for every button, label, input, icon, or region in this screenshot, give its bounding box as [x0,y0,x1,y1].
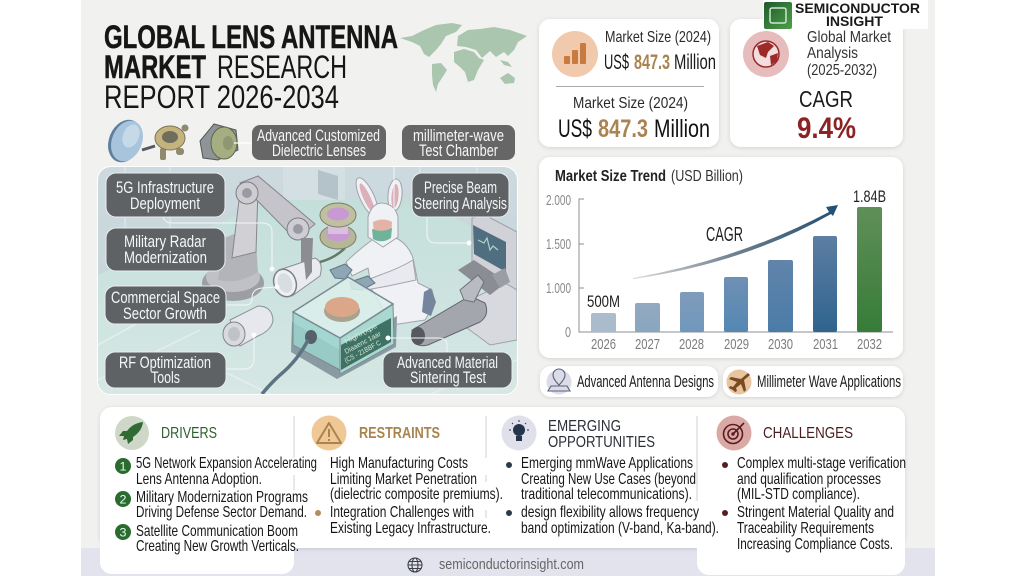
panel: market size card [539,19,719,147]
year labels: 2029 [724,336,749,353]
connector dots [252,240,472,340]
y axis labels: 2.000 [546,192,571,209]
icon: web globe [408,558,422,572]
icon: target [716,416,752,450]
numbered list: 3 [120,526,127,540]
label: RF optimization tools [105,352,226,388]
numbered list: 5G Network Expansion Accelerating [136,455,317,472]
numbered list [115,455,317,555]
bullet list: Creating New Use Cases (beyond [521,471,696,488]
technician in bunny-ear suit [330,175,436,325]
panel: market size card: 847.3 [634,51,670,74]
panel: market size card: Million [674,51,716,74]
panel: bottom summary [100,407,906,575]
section: drivers: DRIVERS [161,425,217,442]
numbered list: 1 [120,460,127,474]
panel: CAGR card: 9.4% [797,112,856,145]
bullet list: Existing Legacy Infrastructure. [330,520,491,537]
label: millimeter-wave test chamber [402,125,515,160]
panel: market size card: Million [654,115,710,143]
chart title: (USD Billion) [671,168,743,185]
pill: advanced antenna designs: Advanced Antenna Designs [577,372,714,391]
label: precise beam steering analysis [412,173,509,217]
panel: market size card: 847.3 [598,115,648,143]
section: challenges [716,416,906,553]
icon: dielectric lens [102,115,155,167]
sintering tank: Highr(xpe [344,323,379,346]
pill: millimeter wave applications [723,366,903,397]
bullet list: Complex multi-stage verification [737,455,906,472]
panel: CAGR card: Analysis [807,45,858,62]
bullet list: (MIL-STD compliance). [737,486,860,503]
footer band [81,548,935,576]
icon: light bulb [502,416,536,450]
section: restraints [312,416,503,537]
bullet list: design flexibility allows frequency [521,504,699,521]
panel: lab scene [97,166,518,395]
bullet list: Limiting Market Penetration [330,471,477,488]
numbered list: Lens Antenna Adoption. [136,471,262,488]
sintering tank [262,277,397,394]
bars [591,207,882,332]
label: advanced material sintering test: Advanced Material [397,354,498,372]
section: challenges: CHALLENGES [763,425,853,442]
y axis labels [546,192,571,341]
bullet list [506,455,719,537]
sintering tank: Diaaenc 1aar [344,331,383,356]
label: RF optimization tools: Tools [151,369,180,387]
label: advanced material sintering test [383,352,512,388]
robot arm [202,176,315,301]
label: millimeter-wave test chamber: Test Chamber [419,142,498,160]
icon: globe [743,31,789,77]
panel: market size trend chart: CAGR [706,224,743,246]
label: precise beam steering analysis: Steering Analysis [414,195,507,213]
panel: CAGR card: Global Market [807,29,891,46]
bullet list: Emerging mmWave Applications [521,455,693,472]
label: 5G infrastructure deployment: Deployment [130,195,200,213]
logo: INSIGHT [826,13,883,29]
label: advanced customized dielectric lenses: Dielectric Lenses [272,142,366,160]
connector lines [163,167,469,369]
title: MARKET [104,49,206,85]
year labels: 2032 [857,336,882,353]
label: advanced material sintering test: Sintering Test [410,369,486,387]
label: precise beam steering analysis: Precise Beam [424,179,497,197]
numbered list: 2 [120,492,127,506]
panel: CAGR card: (2025-2032) [807,62,877,79]
panel: market size trend chart [539,157,903,358]
footer website: semiconductorinsight.com [439,557,584,573]
section: emerging opportunities: EMERGING [548,418,621,435]
spare lens cylinder [223,306,273,346]
icon: warning [312,416,346,450]
label: advanced customized dielectric lenses: Advanced Customized [257,127,380,145]
label: commercial space sector growth [105,286,226,324]
icon: ring mount [155,124,188,160]
year labels: 2031 [813,336,838,353]
panel: market size card: Market Size (2024) [573,95,688,112]
bullet list: High Manufacturing Costs [330,455,468,472]
handheld probe camera [411,275,487,346]
sintering tank: (CS - 21BBF C [344,340,382,365]
panel: CAGR card [730,19,903,147]
section: restraints: RESTRAINTS [359,425,440,442]
bullet list [315,455,503,537]
section: emerging opportunities: OPPORTUNITIES [548,434,655,451]
label: military radar modernization: Military Radar [124,233,206,251]
label: military radar modernization [106,228,225,271]
bullet list: Increasing Compliance Costs. [737,536,893,553]
panel: market size card: US$ [604,51,629,74]
icon: bar chart [552,31,598,77]
lens cylinder [270,248,345,300]
label: RF optimization tools: RF Optimization [119,354,211,372]
bullet list: Integration Challenges with [330,504,474,521]
label: advanced customized dielectric lenses [252,125,386,160]
icon: antenna module [200,124,252,160]
numbered list: Creating New Growth Verticals. [136,538,299,555]
year labels [591,336,882,353]
ring stack [320,203,356,249]
bullet list: band optimization (V-band, Ka-band). [521,520,719,537]
title: GLOBAL LENS ANTENNA [104,19,398,55]
icon: rocket [115,416,149,450]
y axis labels: 0 [565,324,571,341]
bullet list: Stringent Material Quality and [737,504,894,521]
year labels: 2026 [591,336,616,353]
year labels: 2030 [768,336,793,353]
y axis labels: 1.000 [546,280,571,297]
CAGR arrow [633,205,838,279]
title: RESEARCH [217,49,347,85]
section: drivers [115,416,317,555]
pill: millimeter wave applications: Millimeter Wave Applications [757,372,901,391]
title: REPORT 2026-2034 [104,79,339,115]
bullet list: (dielectric composite premiums). [330,486,503,503]
title [104,19,398,115]
numbered list: Satellite Communication Boom [136,523,298,540]
logo: SEMICONDUCTOR [795,0,920,16]
numbered list: Military Modernization Programs [136,489,308,506]
bullet list: Traceability Requirements [737,520,874,537]
label: commercial space sector growth: Commercial Space [111,289,220,307]
bullet list: and qualification processes [737,471,881,488]
bullet list: traditional telecommunications). [521,486,692,503]
chart title: Market Size Trend [555,168,666,185]
pill: advanced antenna designs [540,366,718,397]
label: military radar modernization: Modernization [124,249,207,267]
panel: market size card: US$ [558,115,592,143]
y axis labels: 1.500 [546,236,571,253]
world map [400,23,527,92]
panel: CAGR card: CAGR [799,86,853,112]
year labels: 2027 [635,336,660,353]
section: emerging opportunities [502,416,719,537]
label: 5G infrastructure deployment: 5G Infrastructure [116,179,214,197]
label: 5G infrastructure deployment [106,173,225,217]
bullet list [722,455,906,553]
panel: market size trend chart: 1.84B [853,188,886,206]
panel: market size card: Market Size (2024) [605,29,711,46]
label: millimeter-wave test chamber: millimeter-wave [413,127,504,145]
numbered list: Driving Defense Sector Demand. [136,504,307,521]
logo [763,0,928,29]
year labels: 2028 [679,336,704,353]
panel: market size trend chart: 500M [587,293,620,311]
computer workstation [458,215,517,345]
label: commercial space sector growth: Sector Growth [123,305,207,323]
